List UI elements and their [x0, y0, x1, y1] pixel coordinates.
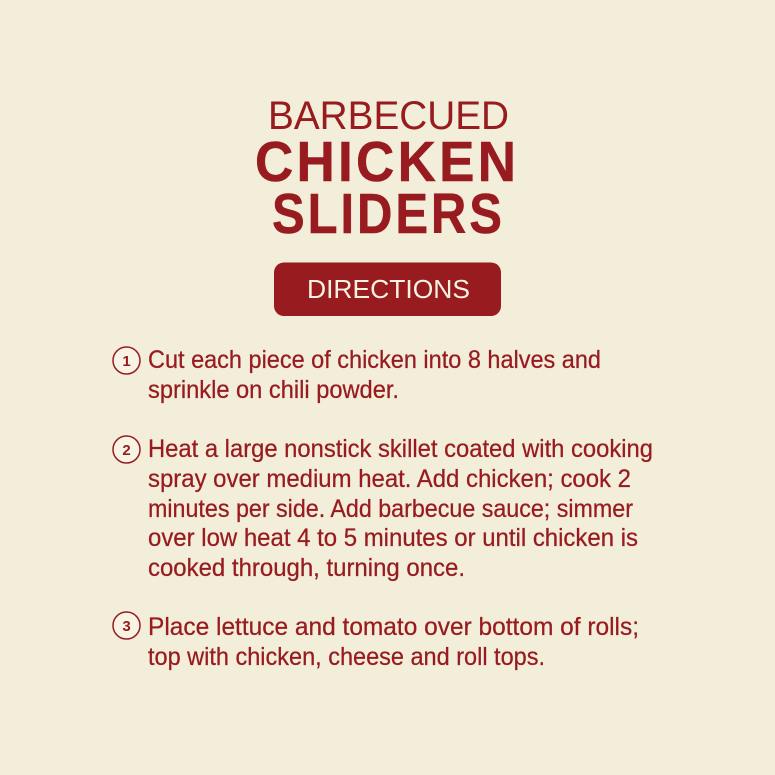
number badge 1: 1: [122, 353, 131, 370]
number badge 3: 3: [122, 618, 131, 635]
step 1 text: sprinkle on chili powder.: [148, 376, 399, 404]
step 3 text: Place lettuce and tomato over bottom of rolls;: [148, 613, 639, 641]
number badge 1: [113, 347, 140, 374]
directions badge: DIRECTIONS: [307, 274, 470, 304]
title: BARBECUED: [268, 94, 509, 138]
step 2 text: cooked through, turning once.: [148, 554, 465, 582]
number badge 3: [113, 612, 140, 639]
step 2: [113, 435, 660, 582]
step 2 text: spray over medium heat. Add chicken; cook 2: [148, 465, 631, 493]
number badge 2: 2: [122, 442, 131, 459]
step 2 text: over low heat 4 to 5 minutes or until chicken is: [148, 524, 638, 552]
step 3: [113, 612, 646, 671]
title: [255, 94, 519, 246]
step 3 text: top with chicken, cheese and roll tops.: [148, 643, 545, 671]
step 1 text: Cut each piece of chicken into 8 halves and: [148, 346, 601, 374]
title: CHICKEN: [255, 129, 519, 193]
step 1: [113, 346, 608, 404]
step 2 text: Heat a large nonstick skillet coated with cooking: [148, 435, 653, 463]
title: SLIDERS: [272, 183, 505, 246]
step 2 text: minutes per side. Add barbecue sauce; simmer: [148, 495, 633, 523]
number badge 2: [113, 436, 140, 463]
directions badge: [274, 262, 501, 316]
